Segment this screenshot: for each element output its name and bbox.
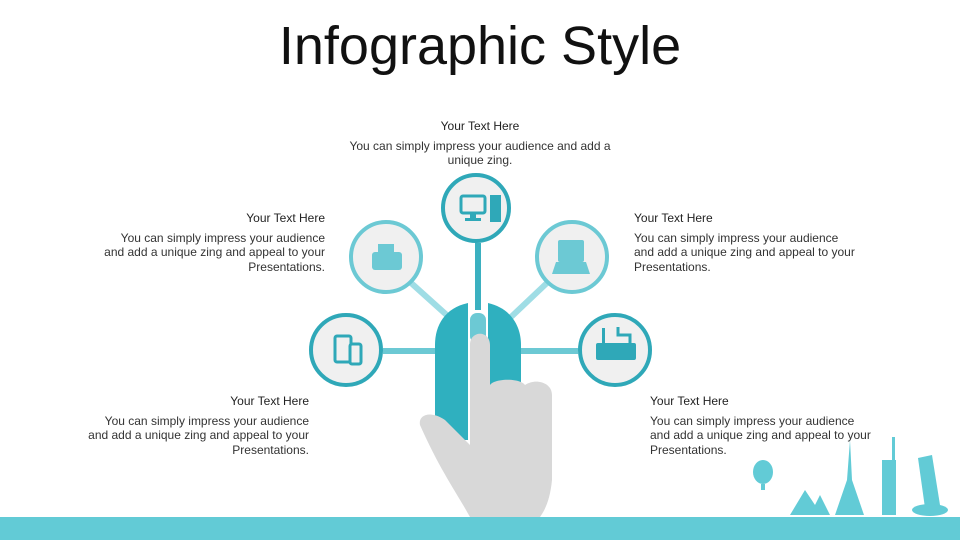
text block: upper right: Your Text Here (634, 211, 713, 225)
circle: tablet (311, 315, 381, 385)
text block: upper left: Presentations. (248, 260, 325, 274)
bottom band (0, 517, 960, 540)
text block: lower right: and add a unique zing and appeal to your (650, 428, 871, 442)
text block: upper right: and add a unique zing and appeal to your (634, 245, 855, 259)
text block: upper left: Your Text Here (246, 211, 325, 225)
text block: lower right: Your Text Here (650, 394, 729, 408)
circle: computer (443, 175, 509, 241)
text block: top: unique zing. (448, 153, 512, 167)
text block: top: Your Text Here (441, 119, 519, 133)
text block: upper left: and add a unique zing and appeal to your (104, 245, 325, 259)
text block: lower left: You can simply impress your audience (105, 414, 309, 428)
circle: laptop (537, 222, 607, 292)
circle: keyboard (580, 315, 650, 385)
text block: upper right: Presentations. (634, 260, 711, 274)
text block: top (349, 119, 611, 167)
text block: lower left: Presentations. (232, 442, 309, 456)
circle: printer (351, 222, 421, 292)
mouse (435, 303, 521, 440)
text block: upper left (104, 211, 325, 274)
text block: lower left (88, 394, 309, 456)
connectors (383, 243, 578, 351)
text block: upper right (634, 211, 855, 274)
text block: upper right: You can simply impress your audience (634, 230, 838, 244)
text block: lower left: Your Text Here (230, 394, 309, 408)
text block: lower right (650, 394, 871, 456)
text block: lower right: Presentations. (650, 442, 727, 456)
text block: upper left: You can simply impress your audience (121, 230, 325, 244)
skyline (753, 437, 948, 516)
title: Infographic Style (279, 16, 681, 76)
hand (420, 334, 552, 517)
text block: top: You can simply impress your audience and add a (349, 138, 611, 152)
text block: lower right: You can simply impress your audience (650, 414, 854, 428)
text block: lower left: and add a unique zing and appeal to your (88, 428, 309, 442)
